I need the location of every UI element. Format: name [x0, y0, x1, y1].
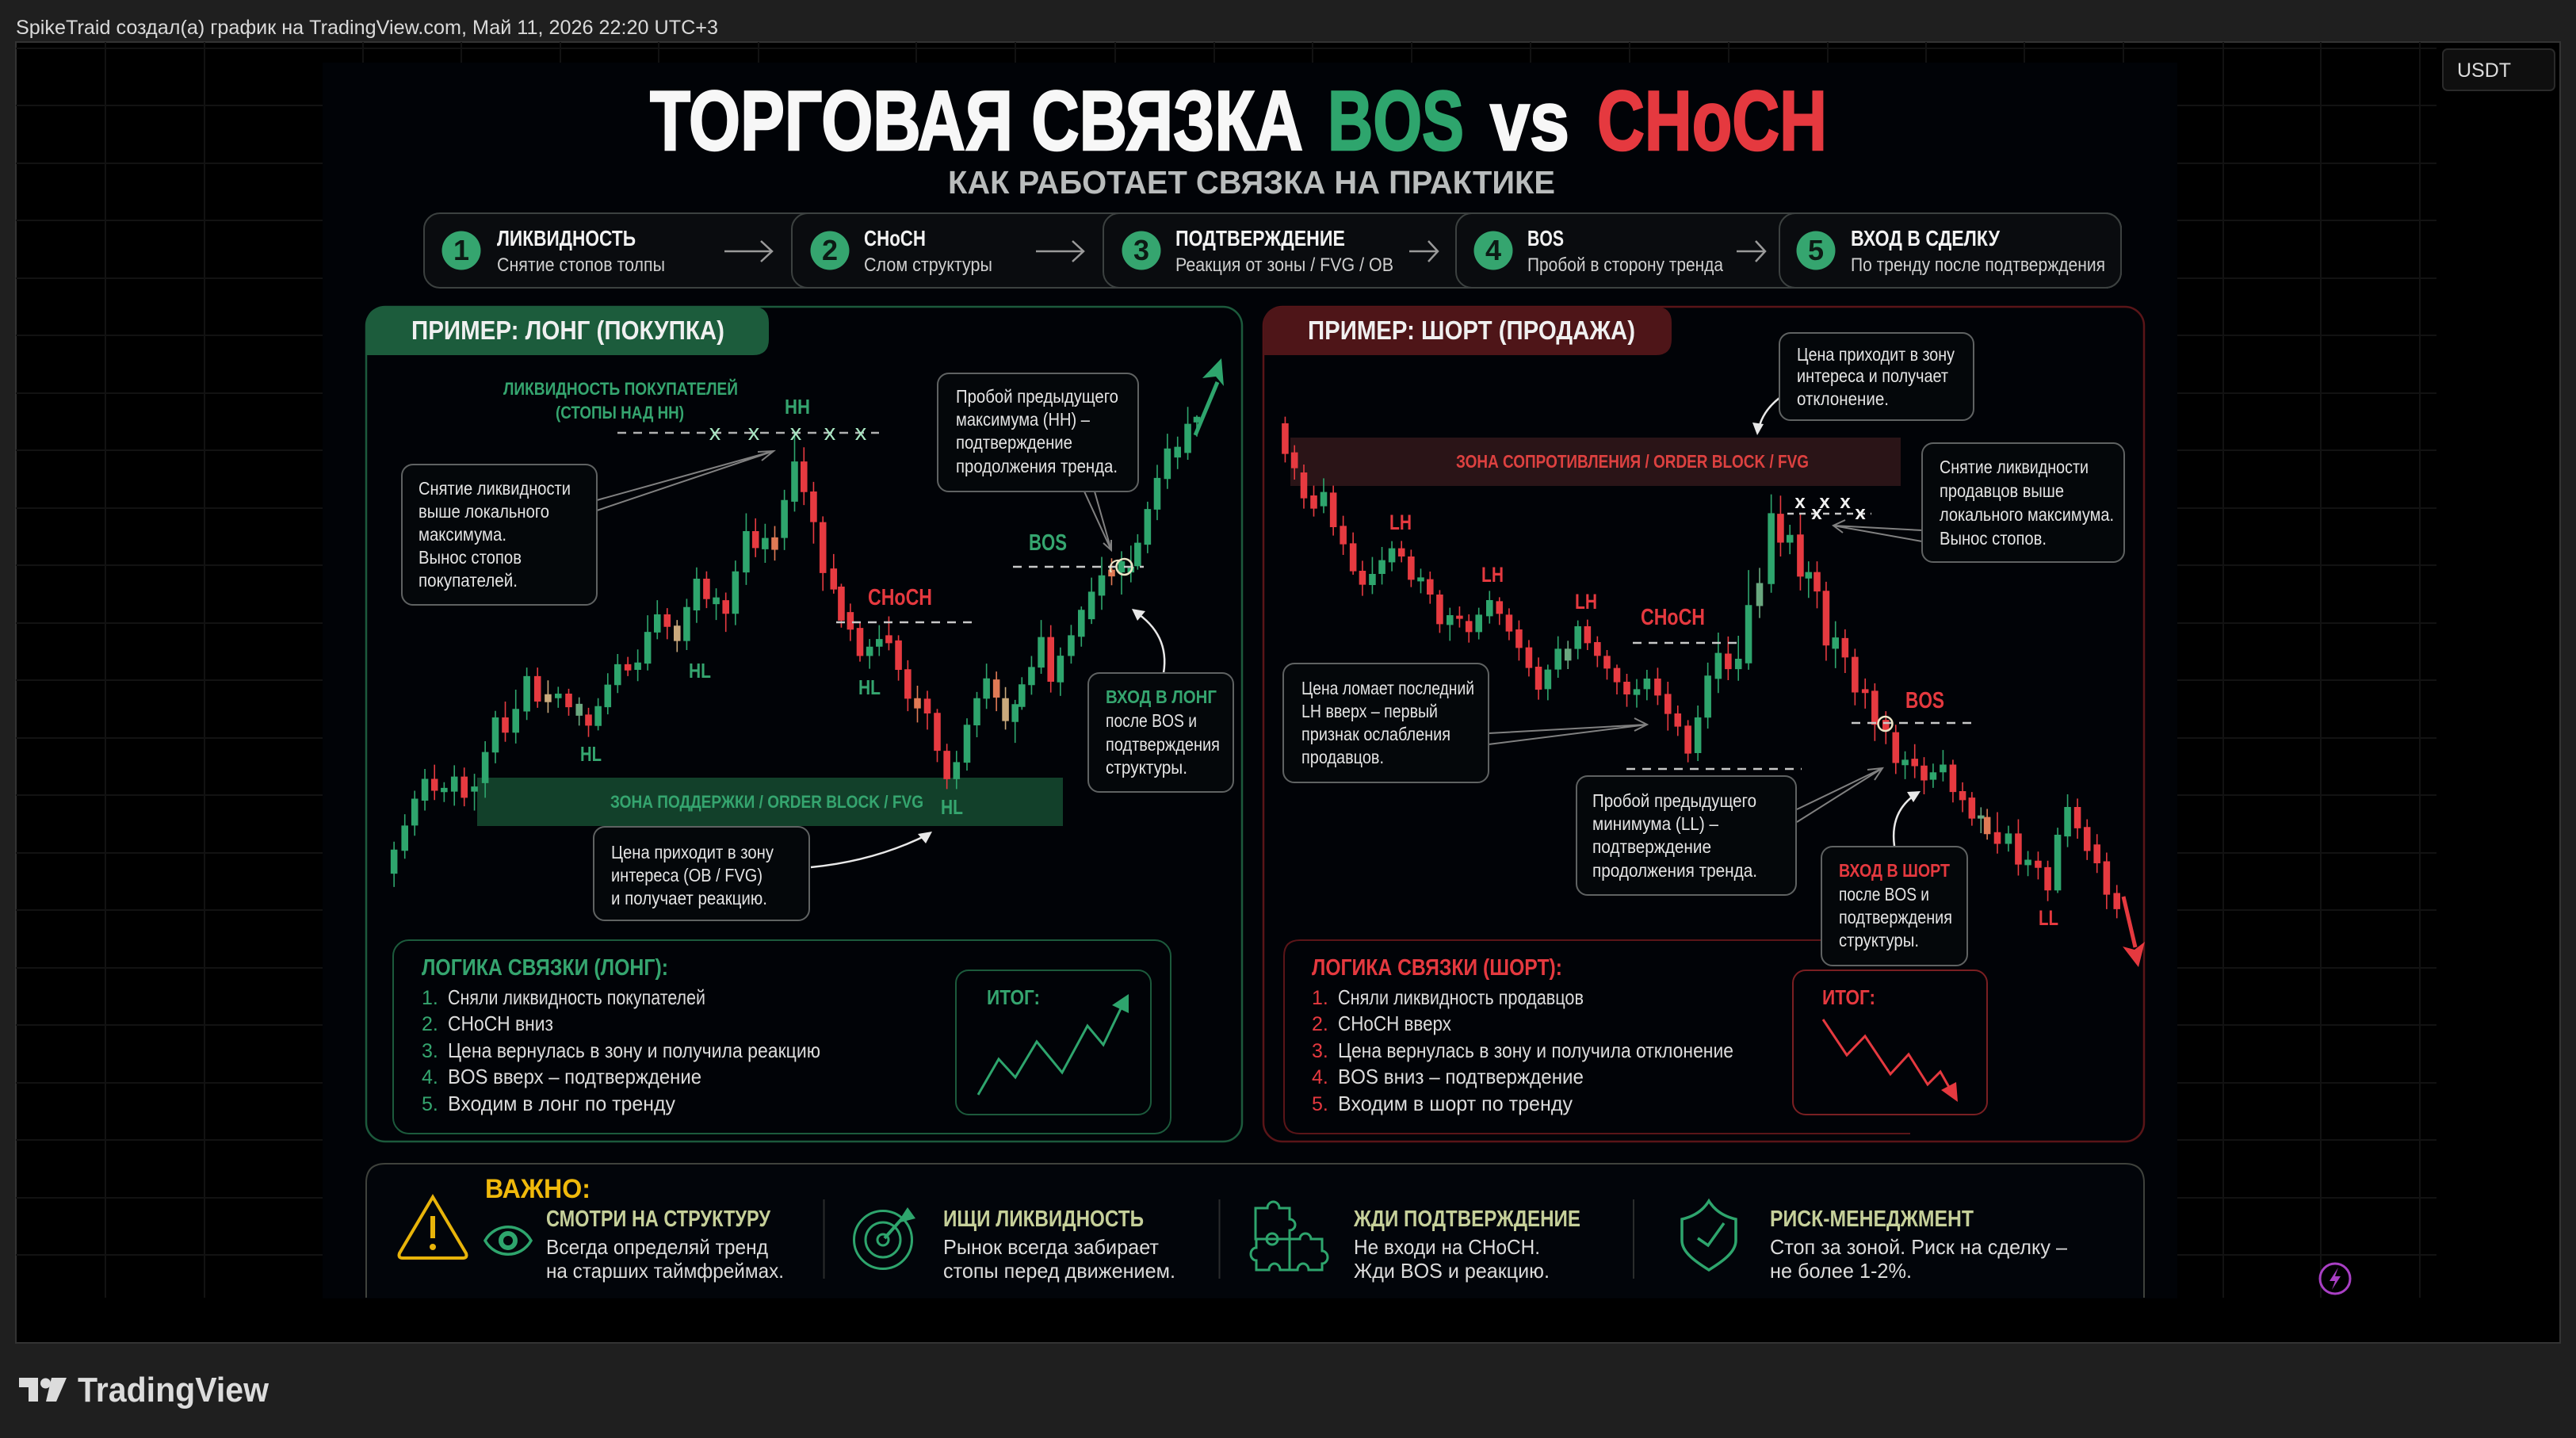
- important tips band: [366, 1164, 2144, 1298]
- HL labels long: [580, 659, 963, 819]
- logic box short: Входим в шорт по тренду: [1338, 1092, 1573, 1115]
- CHoCH short marker: [1633, 605, 1742, 643]
- logic box long: Сняли ликвидность покупателей: [448, 985, 705, 1009]
- BOS short marker: BOS: [1905, 688, 1944, 713]
- step 4: bos: Пробой в сторону тренда: [1527, 254, 1724, 276]
- result box short: ИТОГ:: [1822, 985, 1875, 1009]
- liquidity stops short: x: [1855, 503, 1866, 524]
- tip: risk: Стоп за зоной. Риск на сделку –: [1770, 1235, 2068, 1259]
- callout: break of low: минимума (LL) –: [1592, 813, 1718, 834]
- callout: break of high: максимума (HH) –: [956, 409, 1090, 430]
- logic box long: 2.: [422, 1013, 438, 1035]
- callout: liquidity grab: покупателей.: [419, 570, 518, 591]
- liquidity line with stops: x: [824, 420, 836, 446]
- callout: price reaction: и получает реакцию.: [611, 888, 767, 908]
- callout: seller liquidity: продавцов выше: [1940, 480, 2064, 501]
- callout: LH broken: [1283, 664, 1647, 782]
- step 4: bos: [1456, 213, 2121, 288]
- short panel header: [1263, 307, 1672, 355]
- callout: break of low: Пробой предыдущего: [1592, 790, 1756, 811]
- callout: break of high: [938, 373, 1138, 550]
- callout: LH broken: LH вверх – первый: [1301, 701, 1438, 721]
- icon: lightning: [2320, 1264, 2350, 1294]
- callout: liquidity grab: Снятие ликвидности: [419, 478, 571, 499]
- callout: seller liquidity: Вынос стопов.: [1940, 528, 2047, 549]
- callout: break of high: продолжения тренда.: [956, 456, 1118, 476]
- long candles part 2: [794, 407, 1197, 789]
- callout: seller liquidity: локального максимума.: [1940, 504, 2114, 525]
- logic box short: ЛОГИКА СВЯЗКИ (ШОРТ):: [1312, 955, 1562, 981]
- callout: short entry: подтверждения: [1839, 907, 1952, 927]
- step 4: bos: BOS: [1527, 226, 1564, 251]
- liquidity line with stops: x: [790, 420, 802, 446]
- panel: long example: [366, 307, 1242, 1142]
- tip: structure: Всегда определяй тренд: [546, 1235, 768, 1259]
- callout: short entry: ВХОД В ШОРТ: [1839, 860, 1950, 881]
- liquidity line with stops: x: [855, 420, 867, 446]
- result box long: [956, 970, 1151, 1115]
- liquidity line with stops: [617, 420, 879, 446]
- title: CHoCH: [1597, 73, 1827, 168]
- CHoCH long marker: CHoCH: [868, 585, 932, 610]
- short panel header: ПРИМЕР: ШОРТ (ПРОДАЖА): [1308, 316, 1635, 345]
- result box long: ИТОГ:: [987, 985, 1040, 1009]
- tip: liquidity: Рынок всегда забирает: [943, 1235, 1159, 1259]
- logic box long: CHoCH вниз: [448, 1012, 553, 1035]
- callout: LH broken: признак ослабления: [1301, 724, 1450, 744]
- liquidity label: (СТОПЫ НАД НН): [556, 403, 684, 423]
- long candles part 1: [394, 490, 785, 887]
- tip: confirmation: ЖДИ ПОДТВЕРЖДЕНИЕ: [1353, 1207, 1580, 1232]
- long trend arrow: [1195, 358, 1224, 435]
- logic box long: BOS вверх – подтверждение: [448, 1065, 701, 1088]
- tip: confirmation: [1353, 1207, 1580, 1283]
- step 3: confirmation: [1103, 213, 2121, 288]
- CHoCH short marker: CHoCH: [1641, 605, 1705, 630]
- tip: liquidity: [943, 1207, 1175, 1283]
- step 5: entry: 5: [1808, 234, 1824, 266]
- liquidity label: ЛИКВИДНОСТЬ ПОКУПАТЕЛЕЙ: [503, 379, 738, 399]
- callout: short entry: после BOS и: [1839, 884, 1929, 904]
- liquidity stops short: [1787, 491, 1871, 524]
- callout: rejection: [1752, 333, 1974, 435]
- logic box short: 5.: [1312, 1093, 1328, 1115]
- tip: structure: СМОТРИ НА СТРУКТУРУ: [546, 1207, 771, 1232]
- step 5: entry: По тренду после подтверждения: [1851, 254, 2105, 276]
- BOS long marker: BOS: [1029, 530, 1067, 556]
- tip: structure: [546, 1207, 784, 1283]
- logic box short: 3.: [1312, 1040, 1328, 1062]
- step 1: liquidity: Снятие стопов толпы: [497, 254, 665, 276]
- BOS long marker: [1013, 530, 1144, 575]
- support zone: ЗОНА ПОДДЕРЖКИ / ORDER BLOCK / FVG: [610, 792, 923, 812]
- callout: liquidity grab: [402, 451, 774, 605]
- tip: structure: на старших таймфреймах.: [546, 1259, 784, 1283]
- callout: liquidity grab: выше локального: [419, 501, 549, 522]
- logic box long: [393, 940, 1171, 1134]
- logic box long: 1.: [422, 987, 438, 1009]
- LH labels: LH: [1481, 563, 1504, 587]
- logic box long: ЛОГИКА СВЯЗКИ (ЛОНГ):: [422, 955, 668, 981]
- callout: long entry: [1088, 609, 1233, 792]
- top caption: SpikeTraid создал(а) график на TradingView.com, Май 11, 2026 22:20 UTC+3: [16, 17, 718, 39]
- step 2: choch: [792, 213, 2121, 288]
- LH labels: LH: [1389, 511, 1412, 534]
- icon: eye: [485, 1227, 531, 1254]
- result box short: [1793, 970, 1987, 1115]
- callout: LH broken: Цена ломает последний: [1301, 678, 1474, 698]
- LH labels: LH: [1575, 590, 1597, 614]
- step 3: confirmation: ПОДТВЕРЖДЕНИЕ: [1175, 226, 1345, 251]
- panel: short example: [1263, 307, 2145, 1142]
- long panel header: [366, 307, 769, 355]
- step 1: liquidity: 1: [453, 234, 469, 266]
- logic box long: Входим в лонг по тренду: [448, 1092, 675, 1115]
- callout: price reaction: интереса (OB / FVG): [611, 865, 762, 885]
- TradingView logo: TradingView: [78, 1371, 269, 1409]
- callout: price reaction: Цена приходит в зону: [611, 842, 774, 862]
- callout: long entry: подтверждения: [1106, 734, 1220, 755]
- callout: short entry: структуры.: [1839, 930, 1919, 950]
- tip: confirmation: Не входи на CHoCH.: [1354, 1235, 1540, 1259]
- logic box short: [1284, 940, 1987, 1134]
- title: ТОРГОВАЯ СВЯЗКА: [650, 73, 1303, 168]
- step 5: entry: [1779, 213, 2121, 288]
- icon: warning: [399, 1197, 466, 1258]
- step 3: confirmation: Реакция от зоны / FVG / OB: [1175, 254, 1393, 276]
- resistance zone: [1290, 438, 1901, 486]
- logic box short: CHoCH вверх: [1338, 1012, 1451, 1035]
- tip: risk: РИСК-МЕНЕДЖМЕНТ: [1770, 1207, 1974, 1232]
- logic box short: Цена вернулась в зону и получила отклонение: [1338, 1038, 1733, 1062]
- logic box long: 3.: [422, 1040, 438, 1062]
- logic box long: 4.: [422, 1066, 438, 1088]
- HL labels long: HL: [941, 795, 963, 819]
- long panel header: ПРИМЕР: ЛОНГ (ПОКУПКА): [411, 316, 724, 345]
- tip: liquidity: стопы перед движением.: [943, 1259, 1175, 1283]
- step 2: choch: Слом структуры: [864, 254, 992, 276]
- tip: confirmation: Жди BOS и реакцию.: [1354, 1259, 1550, 1283]
- subtitle: КАК РАБОТАЕТ СВЯЗКА НА ПРАКТИКЕ: [948, 164, 1555, 201]
- icon: target: [854, 1207, 915, 1268]
- callout: break of low: продолжения тренда.: [1592, 860, 1757, 881]
- currency tag: [2443, 49, 2555, 90]
- callout: break of high: подтверждение: [956, 432, 1072, 453]
- HL labels long: HL: [858, 675, 881, 699]
- LL label: LL: [2039, 906, 2058, 930]
- callout: rejection: интереса и получает: [1797, 365, 1948, 386]
- short candles part 2: [1708, 495, 2117, 918]
- title: vs: [1490, 73, 1569, 168]
- support zone: [477, 778, 1063, 826]
- logic box long: 5.: [422, 1093, 438, 1115]
- tip: risk: не более 1-2%.: [1770, 1259, 1912, 1283]
- logic box short: 4.: [1312, 1066, 1328, 1088]
- logic box long: Цена вернулась в зону и получила реакцию: [448, 1038, 820, 1062]
- callout: short entry: [1821, 791, 1967, 966]
- important heading: ВАЖНО:: [485, 1174, 590, 1204]
- step 2: choch: 2: [822, 234, 838, 266]
- liquidity stops short: x: [1819, 491, 1830, 513]
- logic box short: Сняли ликвидность продавцов: [1338, 985, 1584, 1009]
- icon: shield: [1682, 1201, 1736, 1270]
- HL labels long: HL: [689, 659, 711, 683]
- liquidity line with stops: x: [748, 420, 760, 446]
- callout: LH broken: продавцов.: [1301, 747, 1384, 767]
- liquidity stops short: x: [1794, 491, 1806, 513]
- callout: long entry: ВХОД В ЛОНГ: [1106, 686, 1217, 707]
- step 3: confirmation: 3: [1133, 234, 1149, 266]
- logic box short: BOS вниз – подтверждение: [1338, 1065, 1584, 1088]
- callout: price reaction: [594, 827, 932, 920]
- LH labels: [1389, 511, 1597, 614]
- short candles part 1: [1285, 417, 1698, 763]
- liquidity label: [503, 379, 738, 423]
- callout: rejection: Цена приходит в зону: [1797, 344, 1955, 365]
- HH label: HH: [785, 395, 810, 419]
- callout: break of high: Пробой предыдущего: [956, 386, 1118, 407]
- callout: break of low: [1577, 768, 1882, 895]
- step 4: bos: 4: [1485, 234, 1501, 266]
- callout: rejection: отклонение.: [1797, 388, 1889, 409]
- tip: liquidity: ИЩИ ЛИКВИДНОСТЬ: [943, 1207, 1144, 1232]
- callout: liquidity grab: Вынос стопов: [419, 547, 522, 568]
- step 5: entry: ВХОД В СДЕЛКУ: [1851, 226, 2000, 251]
- icon: puzzle: [1251, 1202, 1328, 1270]
- callout: seller liquidity: [1833, 443, 2124, 562]
- step 2: choch: CHoCH: [864, 226, 926, 251]
- currency tag: USDT: [2457, 59, 2511, 82]
- tip: risk: [1770, 1207, 2068, 1283]
- liquidity stops short: x: [1811, 503, 1822, 524]
- callout: long entry: после BOS и: [1106, 710, 1197, 731]
- HL labels long: HL: [580, 742, 602, 766]
- title: BOS: [1328, 73, 1464, 168]
- callout: seller liquidity: Снятие ликвидности: [1940, 457, 2089, 477]
- step 1: liquidity: [424, 213, 2121, 288]
- step 1: liquidity: ЛИКВИДНОСТЬ: [497, 226, 636, 251]
- callout: break of low: подтверждение: [1592, 836, 1711, 857]
- liquidity line with stops: x: [709, 420, 721, 446]
- resistance zone: ЗОНА СОПРОТИВЛЕНИЯ / ORDER BLOCK / FVG: [1456, 451, 1809, 472]
- liquidity stops short: x: [1840, 491, 1851, 513]
- BOS short marker: [1852, 688, 1975, 731]
- logic box short: 1.: [1312, 987, 1328, 1009]
- low dashed line: [1626, 768, 1802, 770]
- callout: long entry: структуры.: [1106, 757, 1187, 778]
- logic box short: 2.: [1312, 1013, 1328, 1035]
- callout: liquidity grab: максимума.: [419, 524, 506, 545]
- short trend arrow: [2123, 897, 2145, 967]
- process steps bar: [424, 213, 2121, 288]
